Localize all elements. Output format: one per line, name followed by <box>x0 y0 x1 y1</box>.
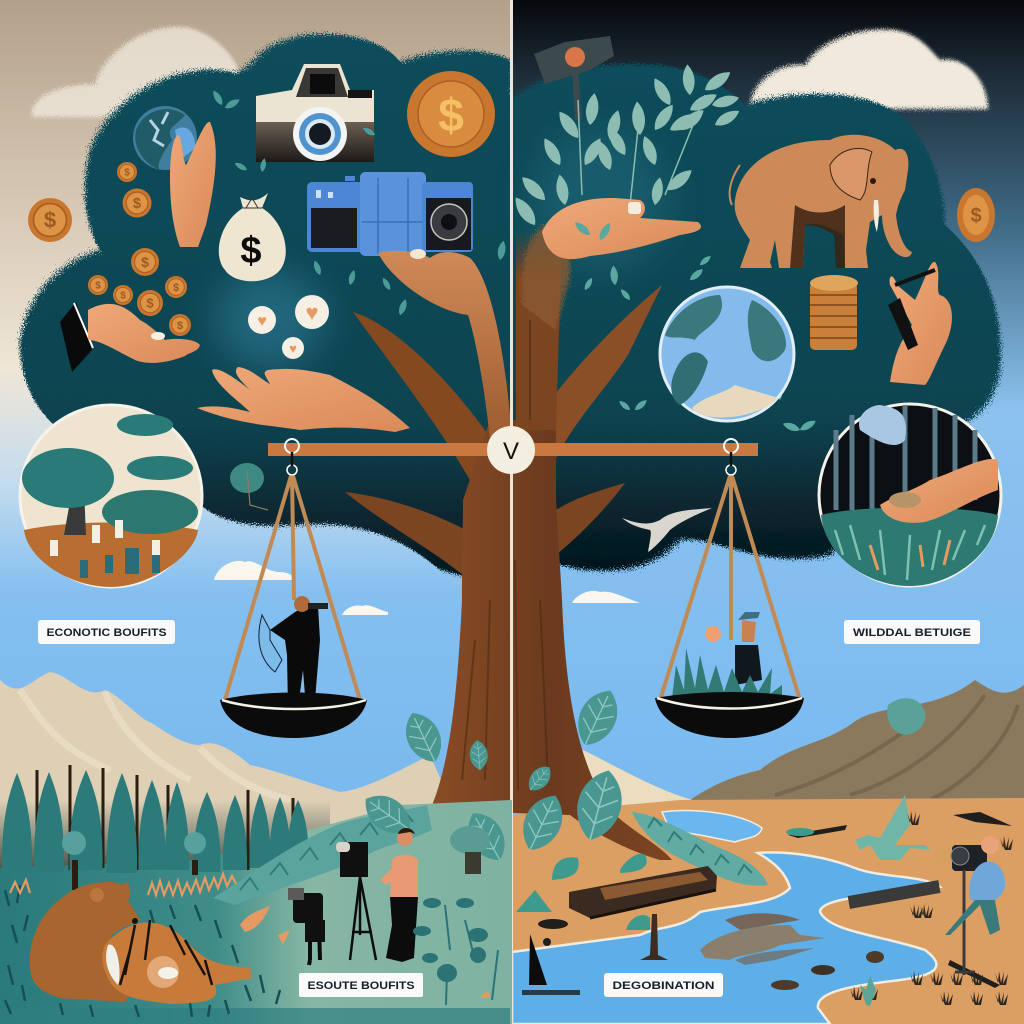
cloud: upper left <box>32 27 240 117</box>
label: economic benefits <box>38 620 175 644</box>
canopy glow right <box>530 130 670 270</box>
background: left sky <box>0 0 512 1024</box>
teal fox-like animal <box>855 795 930 860</box>
mountain shading <box>20 690 290 800</box>
label: wildlife: WILDDAL BETUIGE <box>853 627 971 639</box>
icon: globe in hand <box>133 106 216 247</box>
icon: floating coin right <box>957 188 995 242</box>
canopy glow left <box>215 270 325 370</box>
divider line <box>510 0 513 1024</box>
river wreck / box <box>569 866 717 918</box>
icon: globe right <box>660 287 794 421</box>
centre V badge: V <box>503 438 519 465</box>
mushrooms orange <box>240 905 490 998</box>
bushes right of trunk <box>632 812 768 886</box>
label: wildlife <box>844 620 980 644</box>
plants left foreground <box>413 898 498 1005</box>
person <box>735 645 762 685</box>
icon: open lower hand <box>197 367 410 432</box>
second camera <box>293 893 323 923</box>
mountains: left <box>0 672 450 830</box>
big leaves around trunk <box>356 683 630 868</box>
small leaf sprigs right <box>573 220 817 433</box>
cloud: small left <box>214 561 295 580</box>
cloud: small middle <box>342 605 388 615</box>
background: right sky <box>512 0 1024 1024</box>
stump in water <box>640 914 668 960</box>
grass tuft <box>672 648 782 698</box>
mountains: right <box>690 680 1024 805</box>
icon: hand holding sprig <box>542 198 701 259</box>
stone with lantern <box>450 826 490 874</box>
mountain ridges right <box>775 695 1018 800</box>
brown fade under hand <box>522 225 570 330</box>
trunk top right of centre <box>516 230 562 430</box>
icon: hand with lens <box>888 262 952 385</box>
inset circle: forest and soil <box>819 404 1001 586</box>
balance beam <box>268 443 758 456</box>
inset circle: people among trees <box>20 405 202 587</box>
small leaf sprigs left <box>211 89 507 316</box>
bird <box>622 508 712 552</box>
icon: hearts: ♥ <box>305 300 319 325</box>
tree canopy: right <box>512 64 1001 571</box>
scale pan: right with person in grass <box>655 439 804 738</box>
bark lines <box>462 320 548 790</box>
icon: hearts: ♥ <box>289 341 297 356</box>
icon: floating coin right: $ <box>970 205 982 227</box>
icon: money bag <box>219 193 286 281</box>
cloud: small right <box>572 591 640 603</box>
cameraman right <box>935 836 1005 975</box>
icon: hearts <box>248 295 329 359</box>
backdrop behind the forest row <box>0 800 330 875</box>
icon: hand with suit cuff <box>60 302 200 372</box>
cloud: upper right <box>750 29 988 109</box>
ground: right sand <box>512 798 1024 1024</box>
icon: left side coins <box>28 162 191 336</box>
label: degradation <box>604 973 723 997</box>
scale pan: left with photographer <box>220 439 367 738</box>
floating leaf near mountains <box>887 698 925 735</box>
photographer <box>270 604 320 708</box>
debris <box>538 812 1012 988</box>
bear <box>30 882 140 1002</box>
icon: brown arm holding camera <box>378 249 512 440</box>
small shrubs on sand <box>516 854 650 930</box>
bush band <box>213 805 432 905</box>
ground: left meadow <box>0 800 512 1024</box>
icon: money bag: $ <box>240 230 262 272</box>
label: ecosystem benefits <box>299 973 423 997</box>
grass tufts on sand <box>850 811 1013 1006</box>
flames in grass <box>10 874 236 895</box>
icon: hearts: ♥ <box>257 313 267 330</box>
icon: large gold coin: $ <box>438 89 464 141</box>
label: ecosystem benefits: ESOUTE BOUFITS <box>308 980 414 992</box>
branch upper right <box>532 285 662 460</box>
branch upper left <box>353 312 492 480</box>
hill: cream right of trunk <box>560 740 700 820</box>
illustration: elephant <box>730 135 912 268</box>
cameraman left with tripod <box>288 828 418 965</box>
branch lower left <box>345 492 475 585</box>
label: economic benefits: ECONOTIC BOUFITS <box>46 627 166 639</box>
tiger <box>102 920 252 1004</box>
icon: coin stack <box>810 275 858 350</box>
label: degradation: DEGOBINATION <box>612 980 715 992</box>
small tree on canopy <box>230 463 268 510</box>
icon: large gold coin <box>407 71 495 157</box>
stranded animal bodies <box>700 913 884 990</box>
tree trunk <box>345 230 672 860</box>
branch lower right <box>556 483 625 555</box>
ground: bottom strip <box>0 1008 510 1024</box>
sprigs: large leaves <box>511 64 742 229</box>
trunk main <box>430 420 672 860</box>
tree canopy: left <box>20 34 512 590</box>
icon: vintage camera <box>256 64 374 162</box>
pond <box>662 811 762 842</box>
sailboat <box>522 934 580 995</box>
icon: drone-like device <box>534 36 614 120</box>
icon: blue camera <box>307 172 473 256</box>
centre V badge <box>487 426 535 474</box>
forest row <box>2 765 309 890</box>
river <box>512 852 940 1024</box>
grass blades <box>5 885 280 1017</box>
